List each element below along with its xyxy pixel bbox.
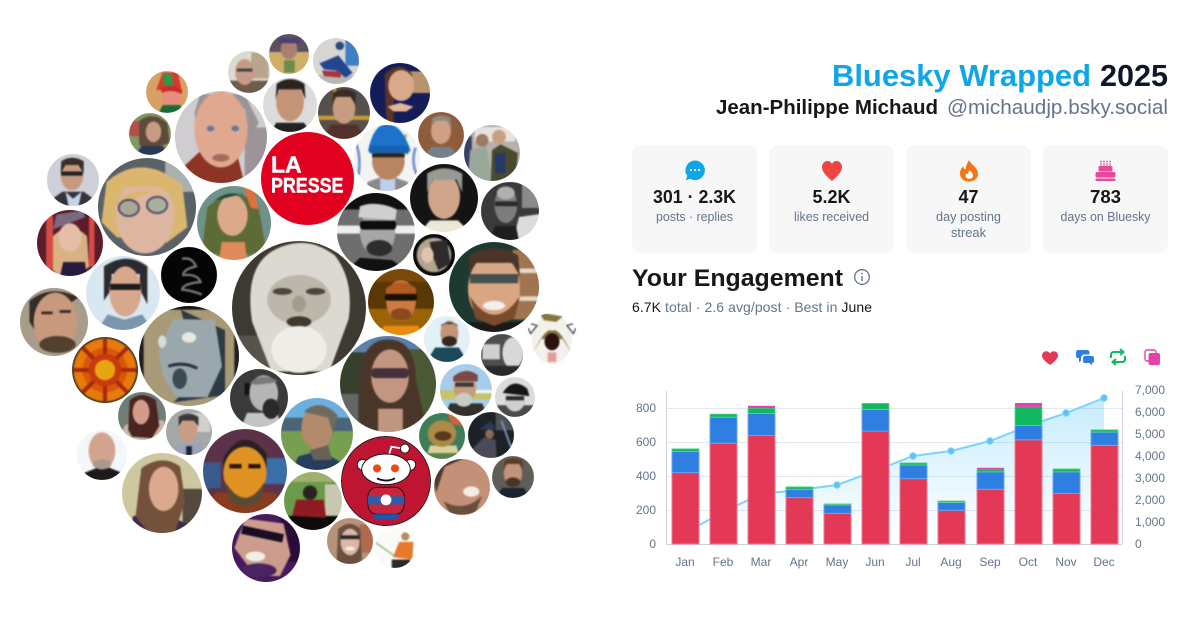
title: 2025 [1100, 58, 1168, 93]
avatar: woman curly hair [129, 113, 171, 155]
avatar: man with shelves [318, 87, 370, 139]
avatar: man beard grey studio [492, 456, 534, 498]
avatar: green portrait woman [197, 186, 271, 260]
month labels: Mar [751, 555, 771, 569]
icon: heart [822, 161, 842, 181]
month labels: Aug [940, 555, 962, 569]
right axis labels [1135, 383, 1165, 551]
title: Bluesky Wrapped [832, 58, 1091, 93]
engagement summary text: 6.7K total · 2.6 avg/post · Best in June [632, 299, 872, 315]
avatar: woman tinted glasses forest [340, 336, 436, 432]
right axis labels: 2,000 [1135, 493, 1165, 507]
right axis labels: 6,000 [1135, 405, 1165, 419]
avatar: black snake album [161, 247, 217, 303]
avatar: woman dark blue [370, 63, 430, 123]
avatar: small dark framed portrait [413, 234, 455, 276]
avatar: man orange vest with tool [375, 528, 415, 568]
icon: legend repost [1111, 349, 1125, 365]
avatar: bald man black and white [481, 182, 539, 240]
stacked bar and line chart [636, 383, 1165, 569]
avatar: Reddit Canadiens mascot [341, 436, 431, 526]
avatar: hockey player [313, 38, 359, 84]
bars: replies [672, 409, 1118, 513]
month labels [675, 555, 1115, 569]
profile name and handle [716, 97, 1168, 119]
month labels: Apr [790, 555, 808, 569]
icon: legend reply [1076, 350, 1094, 366]
right panel: summary and engagement chart [620, 40, 1180, 580]
avatar: elf hat [146, 71, 188, 113]
avatar: man in cap [440, 364, 492, 416]
month labels: Jan [675, 555, 695, 569]
month labels: Sep [979, 555, 1001, 569]
avatar: man in suit outdoors [166, 409, 212, 455]
avatar: black and white sunglasses man [337, 193, 415, 271]
month labels: Nov [1055, 555, 1077, 569]
month labels: Oct [1019, 555, 1038, 569]
avatar: laughing man [434, 459, 490, 515]
avatar: dog with moustache [526, 313, 578, 365]
avatar: cartoon warrior [203, 429, 287, 513]
right axis labels: 1,000 [1135, 515, 1165, 529]
avatar: dark concert performer [468, 412, 514, 458]
avatar: woman brown hair [118, 392, 166, 440]
stat card: days on Bluesky [1043, 145, 1168, 253]
stat card: day posting streak [906, 145, 1031, 253]
profile name and handle: @michaudjp.bsky.social [947, 97, 1168, 119]
left axis labels: 400 [636, 469, 656, 483]
avatar: bald man red turtleneck [175, 91, 267, 183]
avatar: man left close up [20, 288, 88, 356]
icon: legend quote [1145, 350, 1160, 365]
stat card: likes received: likes received [794, 210, 869, 224]
avatar: bearded man glasses smiling [449, 242, 539, 332]
avatar: man teal shirt [424, 316, 470, 362]
heading: Your Engagement: Your Engagement [632, 265, 843, 292]
avatar: blonde woman with glasses [98, 158, 196, 256]
avatar: woman dark cap black and white [495, 377, 535, 417]
avatar: woman pink hat [37, 210, 103, 276]
avatar: La Presse logo: LA [271, 151, 302, 177]
icon: cake [1096, 161, 1116, 181]
left axis labels: 800 [636, 401, 656, 415]
avatar: bald man white background [77, 430, 127, 480]
avatar: AI portrait man [86, 256, 160, 330]
bars: quotes [748, 403, 1042, 469]
avatar: two men [464, 125, 520, 181]
right axis labels: 0 [1135, 537, 1142, 551]
stat card: day posting streak: streak [951, 226, 987, 240]
month labels: Jun [865, 555, 885, 569]
avatar: black and white headphones man [230, 369, 288, 427]
avatar: man in suit with glasses [47, 154, 99, 206]
stat card: likes received [769, 145, 894, 253]
avatar: La Presse logo [261, 132, 354, 225]
icon: flame [960, 160, 978, 182]
left axis labels: 0 [649, 537, 656, 551]
avatar: man dark hair [263, 78, 317, 132]
avatar: man brick wall [418, 112, 464, 158]
avatar: woman glasses [327, 518, 373, 564]
month labels: Dec [1093, 555, 1115, 569]
chart legend [1042, 349, 1160, 366]
icon: speech bubble [686, 160, 705, 180]
avatar: old man white beard [232, 241, 366, 375]
bars: likes [672, 431, 1118, 544]
icon: info [855, 270, 869, 284]
avatar: cartoon bearded character [419, 413, 465, 459]
stat card: posts and replies: posts · replies [656, 210, 733, 224]
icon: legend like [1042, 351, 1058, 365]
right axis labels: 5,000 [1135, 427, 1165, 441]
stat card: posts and replies: 301 · 2.3K [653, 187, 736, 207]
avatar: bald man bookshelf [228, 51, 270, 93]
avatar: man outdoors sky [281, 398, 353, 470]
avatar: black and white side profile [481, 334, 523, 376]
stat card: day posting streak: day posting [936, 210, 1001, 224]
stat card: likes received: 5.2K [812, 187, 850, 207]
left axis labels: 200 [636, 503, 656, 517]
avatar: woman long hair beige [122, 453, 202, 533]
stat card: days on Bluesky: 783 [1090, 187, 1121, 207]
avatar: party hat man [354, 125, 420, 191]
month labels: Jul [905, 555, 921, 569]
stat card: days on Bluesky: days on Bluesky [1060, 210, 1151, 224]
month labels: Feb [713, 555, 734, 569]
profile name and handle: Jean-Philippe Michaud [716, 97, 938, 119]
right axis labels: 7,000 [1135, 383, 1165, 397]
avatar: orange sunglasses man [368, 269, 434, 335]
month labels: May [826, 555, 848, 569]
right axis labels: 3,000 [1135, 471, 1165, 485]
avatar: purple glasses man [232, 514, 300, 582]
avatar: stadium fan [284, 472, 342, 530]
avatar: orange flower [72, 337, 138, 403]
stat card: day posting streak: 47 [958, 187, 978, 207]
avatar: wide eyed man vintage [139, 306, 239, 406]
left axis labels: 600 [636, 435, 656, 449]
avatar: grey hair man black background [410, 164, 478, 232]
stat card: posts and replies [632, 145, 757, 253]
avatar bubble cloud [20, 34, 576, 582]
left axis labels [636, 401, 656, 551]
bars: reposts [672, 403, 1118, 505]
cumulative area and line [685, 395, 1107, 544]
avatar: man colorful background [269, 34, 309, 74]
right axis labels: 4,000 [1135, 449, 1165, 463]
